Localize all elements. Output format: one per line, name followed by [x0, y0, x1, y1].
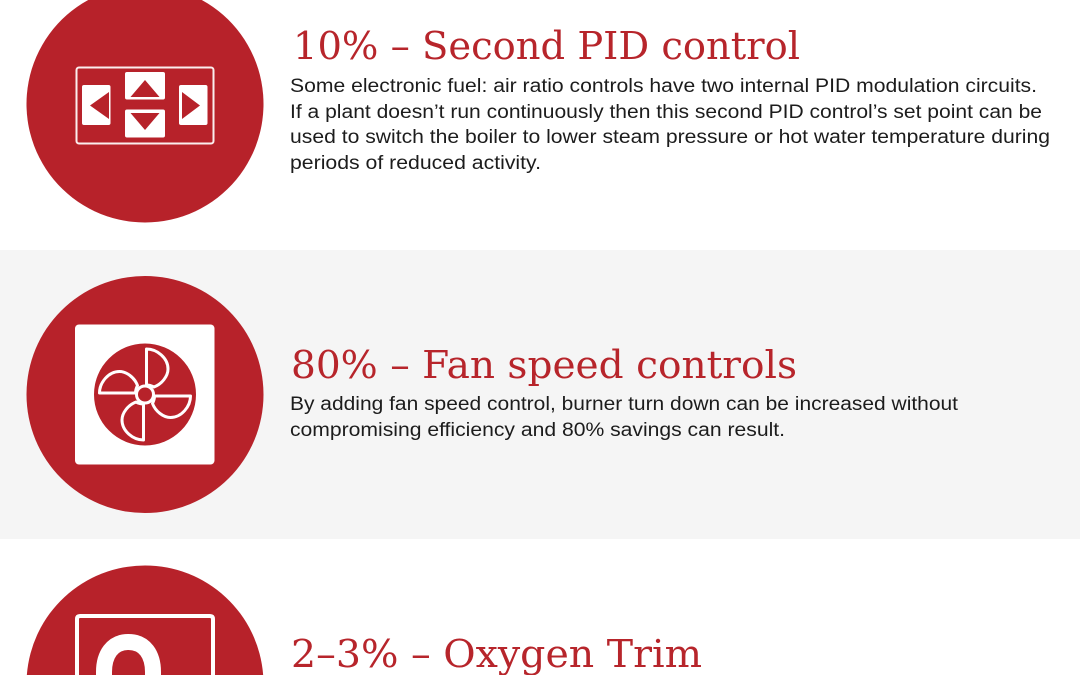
panel: gray band behind fan speed section [0, 250, 1080, 539]
panel: fan speed controls [26, 276, 959, 513]
text block: fan speed description: By adding fan speed control, burner turn down can be increased without [290, 393, 959, 415]
heading: 2-3% Oxygen Trim: 2–3% – Oxygen Trim [291, 632, 702, 675]
text block: second PID description: If a plant doesn’t run continuously then this second PID control’s set point can be [290, 101, 1042, 123]
text block: second PID description: periods of reduced activity. [290, 152, 541, 174]
heading: 80% Fan speed controls: 80% – Fan speed controls [291, 343, 797, 387]
text block: fan speed description [290, 393, 959, 441]
heading: 10% Second PID control: 10% – Second PID control [293, 24, 800, 68]
icon: oxygen symbol in red circle [27, 565, 263, 675]
text block: second PID description: used to switch the boiler to lower steam pressure or hot water temperature during [290, 126, 1050, 148]
text block: fan speed description: compromising efficiency and 80% savings can result. [290, 419, 785, 441]
text block: second PID description: Some electronic fuel: air ratio controls have two internal PID modulation circuits. [290, 75, 1037, 97]
icon: fan in red circle [26, 276, 264, 513]
panel: second PID control [26, 0, 1050, 223]
icon: control buttons in red circle [26, 0, 264, 223]
panel: oxygen trim [27, 565, 702, 675]
text block: second PID description [290, 75, 1050, 174]
